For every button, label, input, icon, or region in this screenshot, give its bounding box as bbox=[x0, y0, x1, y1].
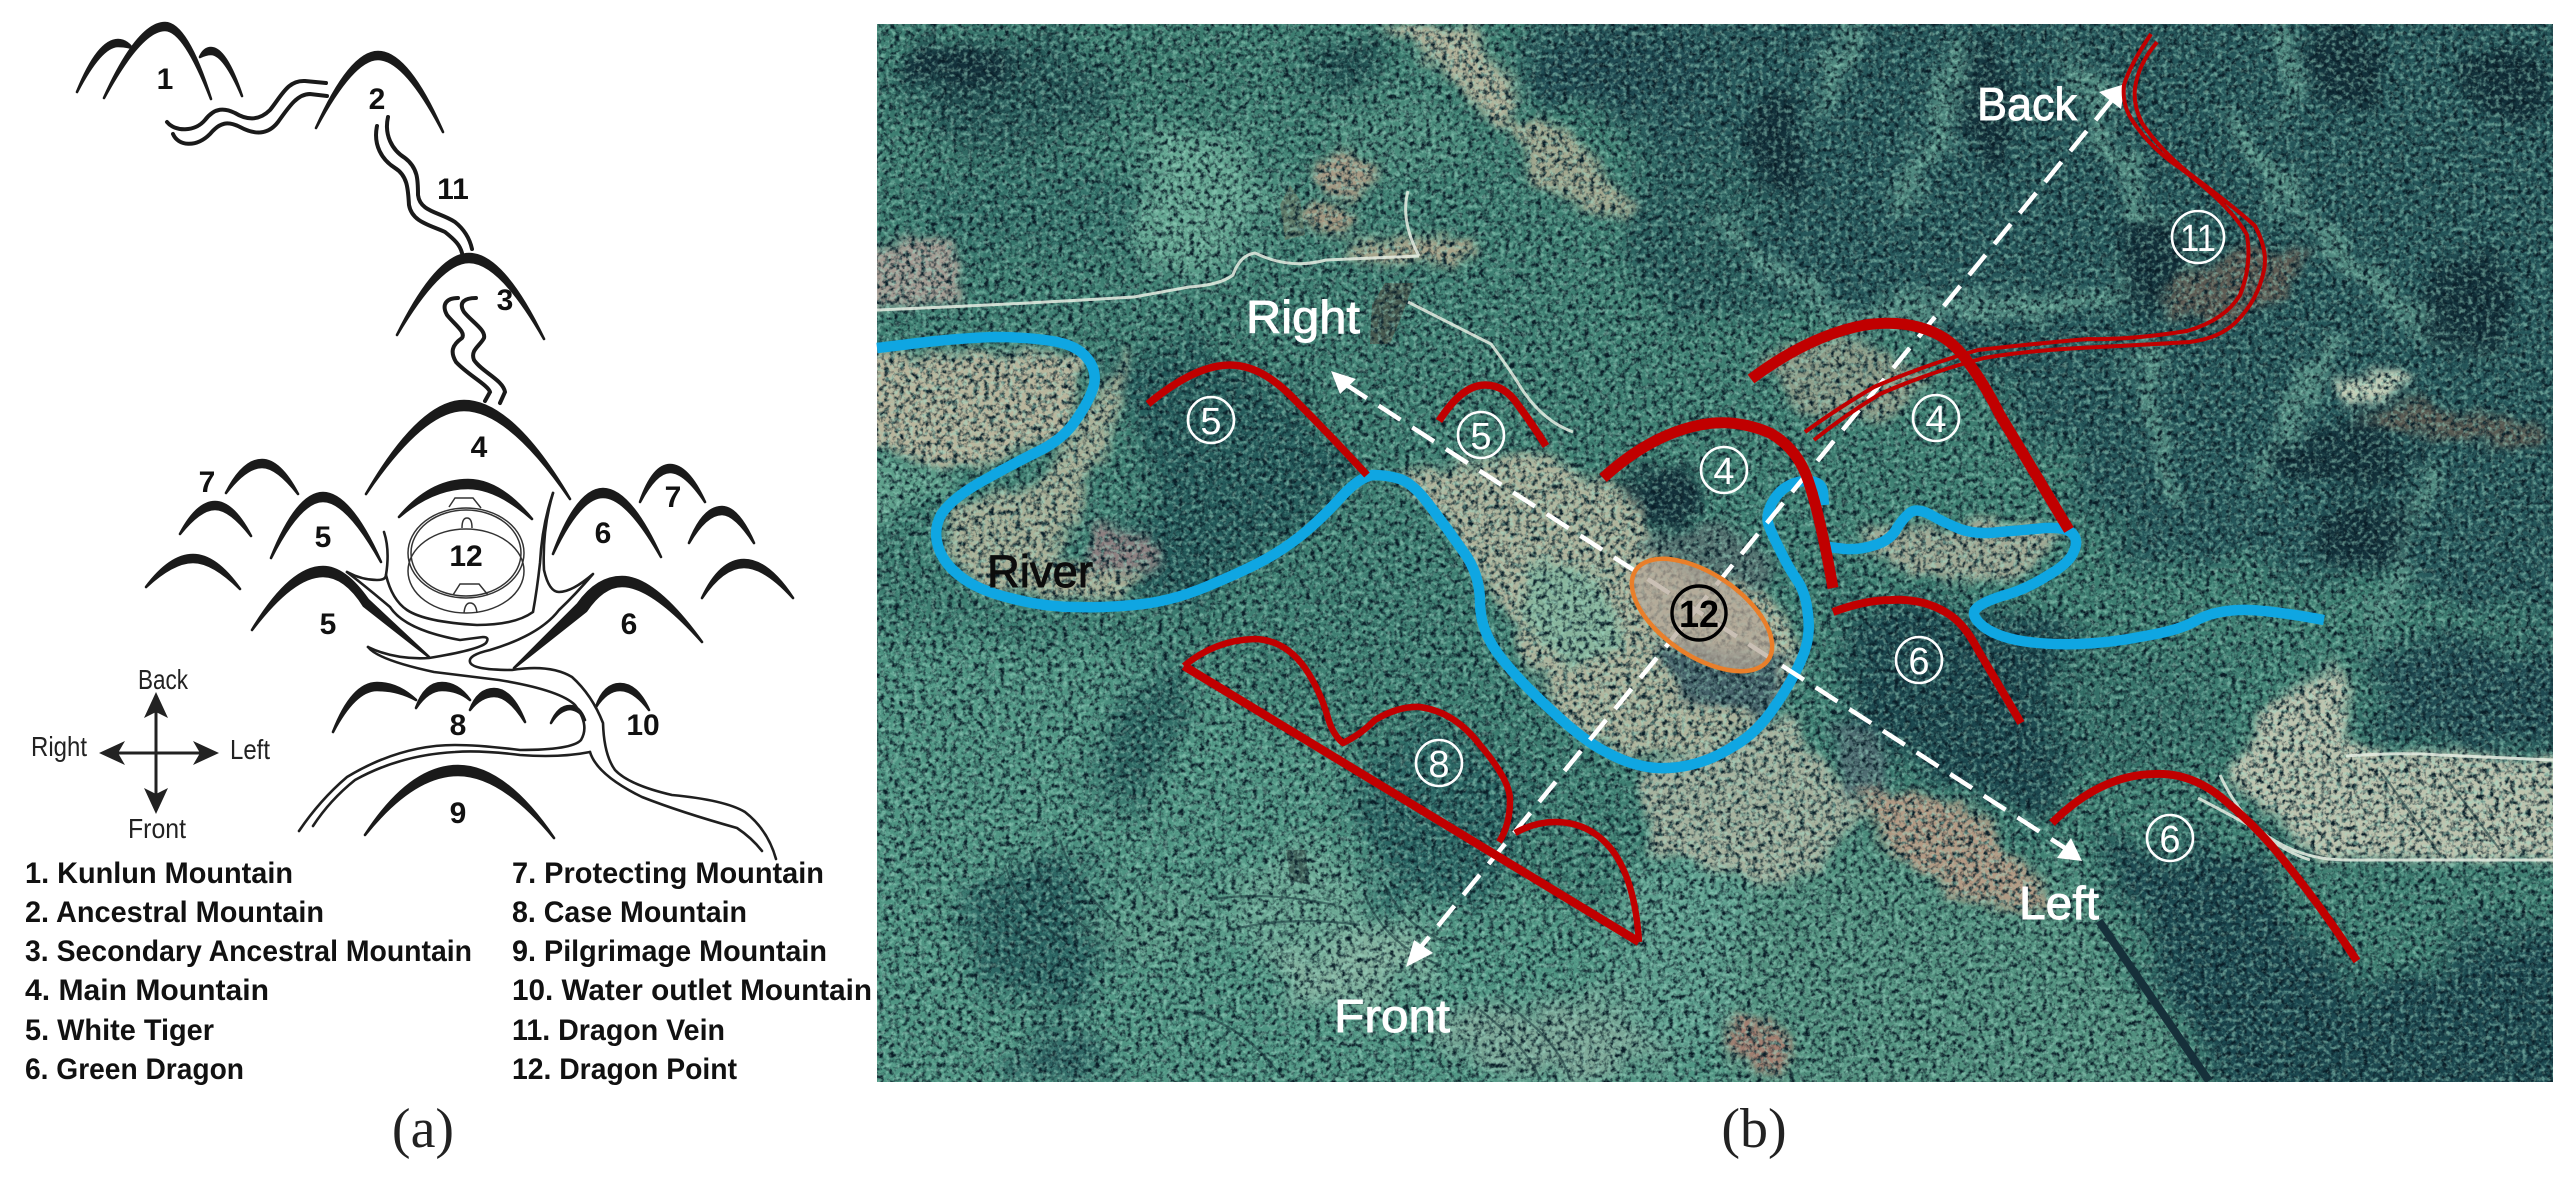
compass rose: Left bbox=[230, 734, 270, 765]
panel (b): annotated aerial view bbox=[840, 0, 2575, 1160]
dragon vein between mountains 1 and 2 bbox=[167, 81, 327, 144]
diagram numbers: 10 bbox=[626, 709, 660, 742]
mountains 6: Green Dragon bbox=[514, 489, 702, 668]
caption (a): (a) bbox=[392, 1098, 454, 1160]
legend: 11. Dragon Vein bbox=[512, 1014, 725, 1047]
mountain 10: Water outlet bbox=[551, 684, 649, 723]
circled numbers: 4 bbox=[1925, 399, 1947, 441]
diagram numbers: 9 bbox=[450, 797, 466, 830]
red double line: Dragon Vein 11 bbox=[1805, 34, 2265, 440]
compass rose: Back bbox=[138, 664, 189, 695]
legend: 2. Ancestral Mountain bbox=[25, 896, 324, 929]
diagram numbers: 8 bbox=[450, 709, 466, 742]
legend: 5. White Tiger bbox=[25, 1014, 214, 1047]
mountains 7 (right): Protecting bbox=[640, 465, 793, 598]
red ridge: Main Mountain 4 bbox=[1603, 323, 2069, 588]
red ridge: Case Mountain 8 bbox=[1184, 639, 1639, 942]
mountains 5: White Tiger bbox=[252, 493, 429, 657]
circled numbers: 6 bbox=[2159, 819, 2181, 861]
circled numbers: 5 bbox=[1470, 416, 1492, 458]
legend: 8. Case Mountain bbox=[512, 896, 747, 929]
legend bbox=[25, 857, 872, 1086]
circled numbers: 11 bbox=[2180, 218, 2216, 260]
compass rose: Front bbox=[128, 813, 186, 844]
mountain 4: Main bbox=[366, 401, 570, 519]
red ridge: Green Dragon 6 bbox=[1833, 600, 2357, 961]
legend: 12. Dragon Point bbox=[512, 1053, 737, 1086]
dashed axis: right to left bbox=[1331, 371, 2082, 861]
label: Back: Back bbox=[1977, 78, 2078, 130]
terraces bbox=[985, 770, 2500, 1080]
river bbox=[877, 337, 2324, 768]
legend: 9. Pilgrimage Mountain bbox=[512, 935, 827, 968]
dark forest patches bbox=[905, 34, 2550, 576]
label: Right: Right bbox=[1246, 291, 1360, 343]
label: Front: Front bbox=[1334, 990, 1450, 1042]
circled numbers: 8 bbox=[1428, 744, 1450, 786]
legend: 7. Protecting Mountain bbox=[512, 857, 824, 890]
water courses around the dragon point bbox=[299, 493, 776, 859]
dragon point ellipse 12 bbox=[1613, 536, 1791, 694]
compass rose: Right bbox=[31, 731, 87, 762]
diagram numbers: 12 bbox=[449, 540, 483, 573]
dragon vein between mountains 3 and 4 bbox=[445, 298, 505, 403]
diagram numbers: 7 bbox=[665, 481, 681, 514]
diagram numbers: 5 bbox=[320, 608, 336, 641]
compass rose bbox=[31, 664, 270, 844]
dragon vein 11 between mountains 2 and 3 bbox=[376, 117, 472, 253]
diagram numbers: 4 bbox=[471, 431, 488, 464]
dragon point ellipse 12: 12 bbox=[1679, 594, 1719, 636]
label: Left: Left bbox=[2019, 877, 2099, 929]
label: River: River bbox=[987, 546, 1093, 597]
mountain 1: Kunlun bbox=[77, 23, 242, 99]
legend: 6. Green Dragon bbox=[25, 1053, 244, 1086]
legend: 3. Secondary Ancestral Mountain bbox=[25, 935, 472, 968]
aerial terrain background bbox=[840, 0, 2575, 1130]
forest ridgelines bbox=[1715, 30, 2494, 620]
mountains 7 (left): Protecting bbox=[146, 460, 298, 589]
diagram numbers: 1 bbox=[157, 63, 173, 96]
diagram numbers: 3 bbox=[497, 284, 513, 317]
diagram numbers: 5 bbox=[315, 521, 331, 554]
diagram numbers bbox=[157, 63, 681, 830]
red ridge: White Tiger 5 bbox=[1148, 365, 1546, 475]
diagram numbers: 6 bbox=[595, 517, 611, 550]
mountain 9: Pilgrimage bbox=[365, 766, 554, 838]
legend: 10. Water outlet Mountain bbox=[512, 974, 872, 1007]
circled numbers: 6 bbox=[1908, 641, 1930, 683]
diagram numbers: 6 bbox=[621, 608, 637, 641]
mountain 3: Secondary Ancestral bbox=[397, 254, 544, 339]
dashed axis: back to front bbox=[1406, 84, 2125, 967]
diagram numbers: 2 bbox=[369, 83, 385, 116]
caption (b): (b) bbox=[1721, 1098, 1787, 1160]
circled numbers bbox=[1188, 211, 2224, 861]
mountains 8: Case bbox=[333, 683, 525, 732]
diagram numbers: 7 bbox=[199, 466, 215, 499]
legend: 1. Kunlun Mountain bbox=[25, 857, 293, 890]
panel (a): feng shui mountain diagram bbox=[25, 23, 872, 1160]
circled numbers: 4 bbox=[1713, 451, 1735, 493]
legend: 4. Main Mountain bbox=[25, 974, 269, 1007]
mountain 2: Ancestral bbox=[316, 52, 443, 132]
circled numbers: 5 bbox=[1200, 401, 1222, 443]
diagram numbers: 11 bbox=[437, 173, 469, 206]
dragon point enclosure bbox=[408, 498, 524, 613]
